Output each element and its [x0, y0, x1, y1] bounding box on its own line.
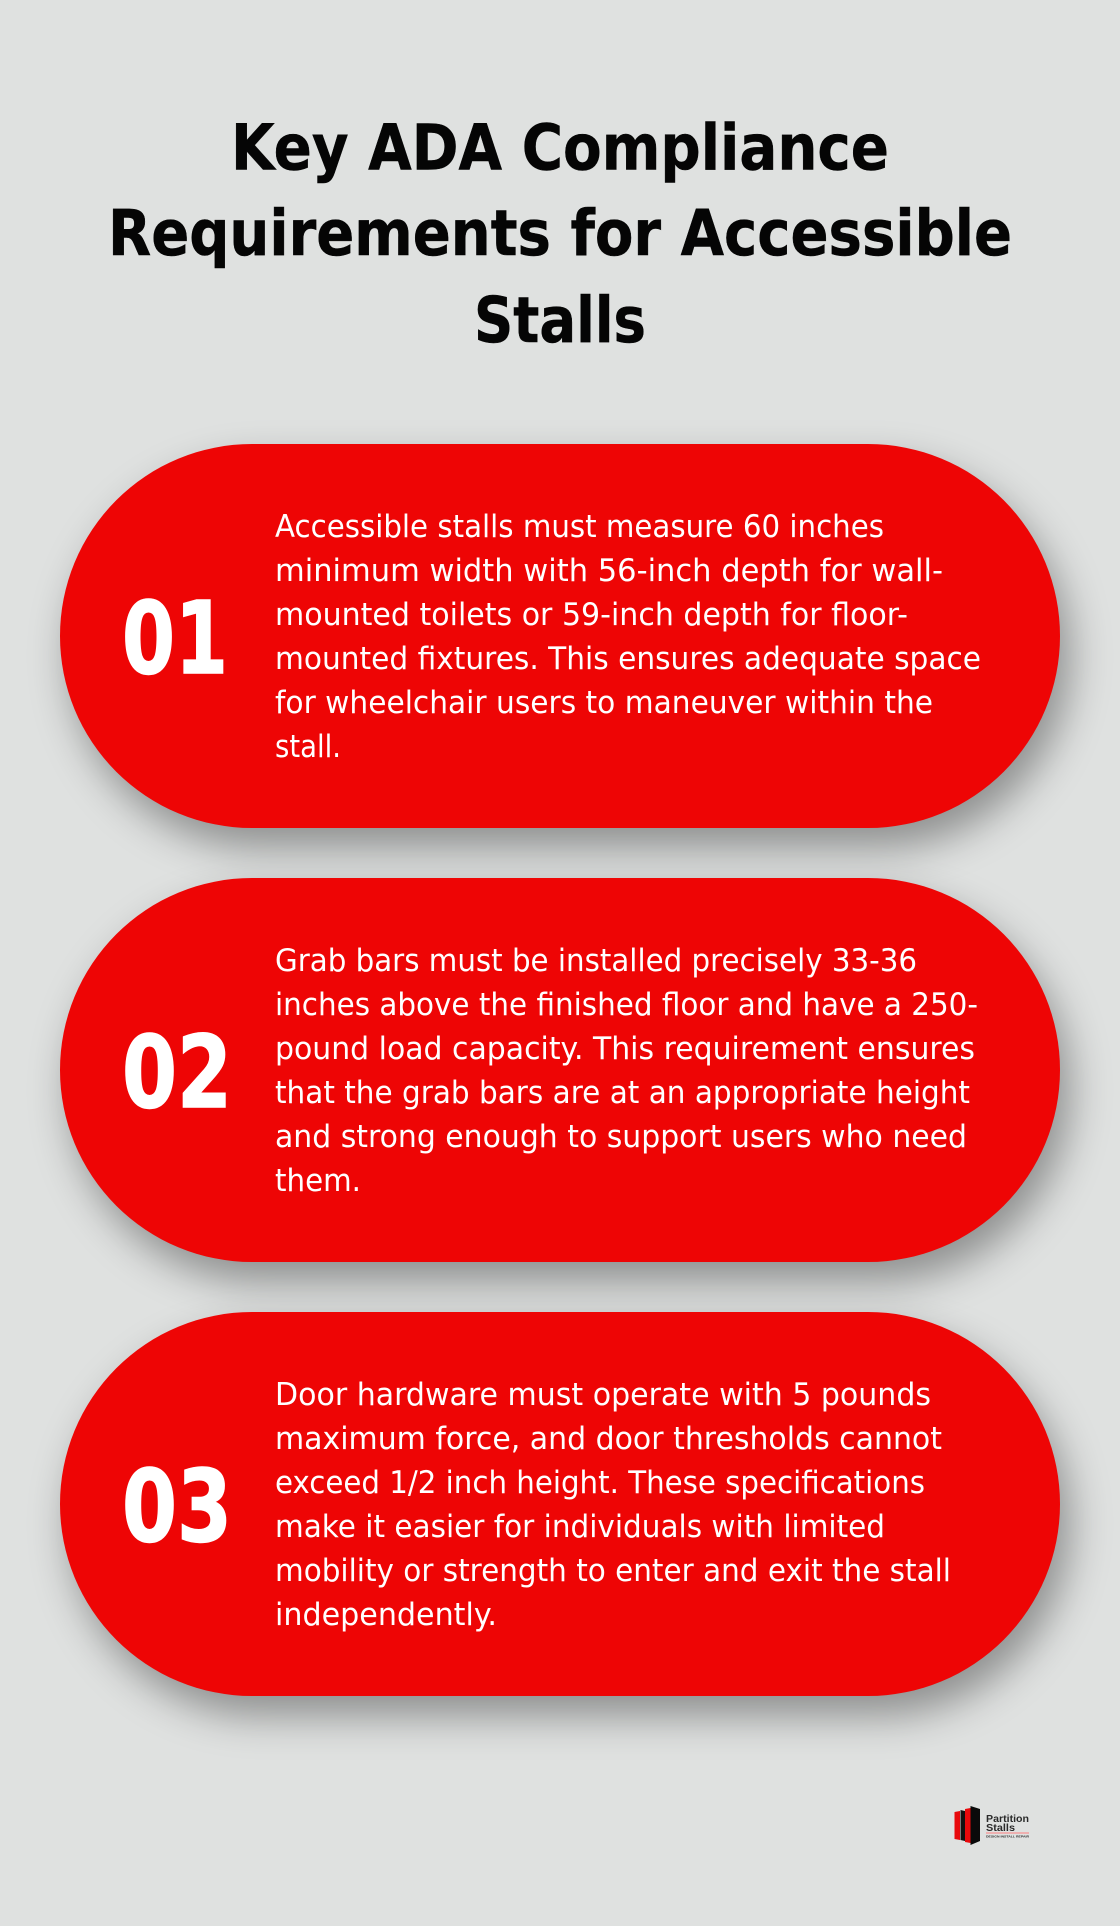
text block: door hardware: make it easier for individuals with limited [275, 1509, 885, 1545]
title [108, 112, 1012, 357]
text block: stall dimensions [275, 509, 981, 765]
step number 03: 03 [122, 1448, 232, 1565]
text block: grab bars [275, 943, 978, 1199]
panel: requirement 02 grab bars [60, 878, 1060, 1262]
text block: stall dimensions: mounted fixtures. This ensures adequate space [275, 641, 981, 677]
logo: Partition Stalls [954, 1806, 1030, 1845]
wordmark: Partition [986, 1813, 1029, 1825]
text block: door hardware: mobility or strength to enter and exit the stall [275, 1553, 951, 1589]
step number 02: 02 [122, 1014, 232, 1131]
text block: stall dimensions: mounted toilets or 59-inch depth for floor- [275, 597, 908, 633]
text block: door hardware: independently. [275, 1597, 497, 1633]
icon: partition panels [954, 1806, 980, 1845]
text block: stall dimensions: stall. [275, 729, 341, 765]
text block: door hardware: maximum force, and door thresholds cannot [275, 1421, 942, 1457]
title: Requirements for Accessible [108, 197, 1012, 270]
text block: door hardware: Door hardware must operate with 5 pounds [275, 1377, 931, 1413]
text block: grab bars: pound load capacity. This requirement ensures [275, 1031, 975, 1067]
text block: stall dimensions: minimum width with 56-inch depth for wall- [275, 553, 943, 589]
text block: grab bars: inches above the finished floor and have a 250- [275, 987, 978, 1023]
text block: grab bars: that the grab bars are at an appropriate height [275, 1075, 970, 1111]
wordmark: DESIGN INSTALL REPAIR [986, 1834, 1030, 1838]
text block: door hardware [275, 1377, 951, 1633]
title: Key ADA Compliance [231, 112, 889, 184]
text block: grab bars: and strong enough to support users who need [275, 1119, 967, 1155]
text block: grab bars: them. [275, 1163, 361, 1199]
step number 01: 01 [122, 580, 228, 697]
wordmark [986, 1813, 1030, 1838]
title: Stalls [474, 284, 646, 357]
panel: requirement 03 door hardware [60, 1312, 1060, 1696]
panel: requirement 01 stall dimensions [60, 444, 1060, 828]
text block: stall dimensions: for wheelchair users to maneuver within the [275, 685, 933, 721]
text block: door hardware: exceed 1/2 inch height. These specifications [275, 1465, 925, 1501]
text block: stall dimensions: Accessible stalls must measure 60 inches [275, 509, 884, 545]
text block: grab bars: Grab bars must be installed precisely 33-36 [275, 943, 917, 979]
wordmark: Stalls [986, 1822, 1015, 1834]
